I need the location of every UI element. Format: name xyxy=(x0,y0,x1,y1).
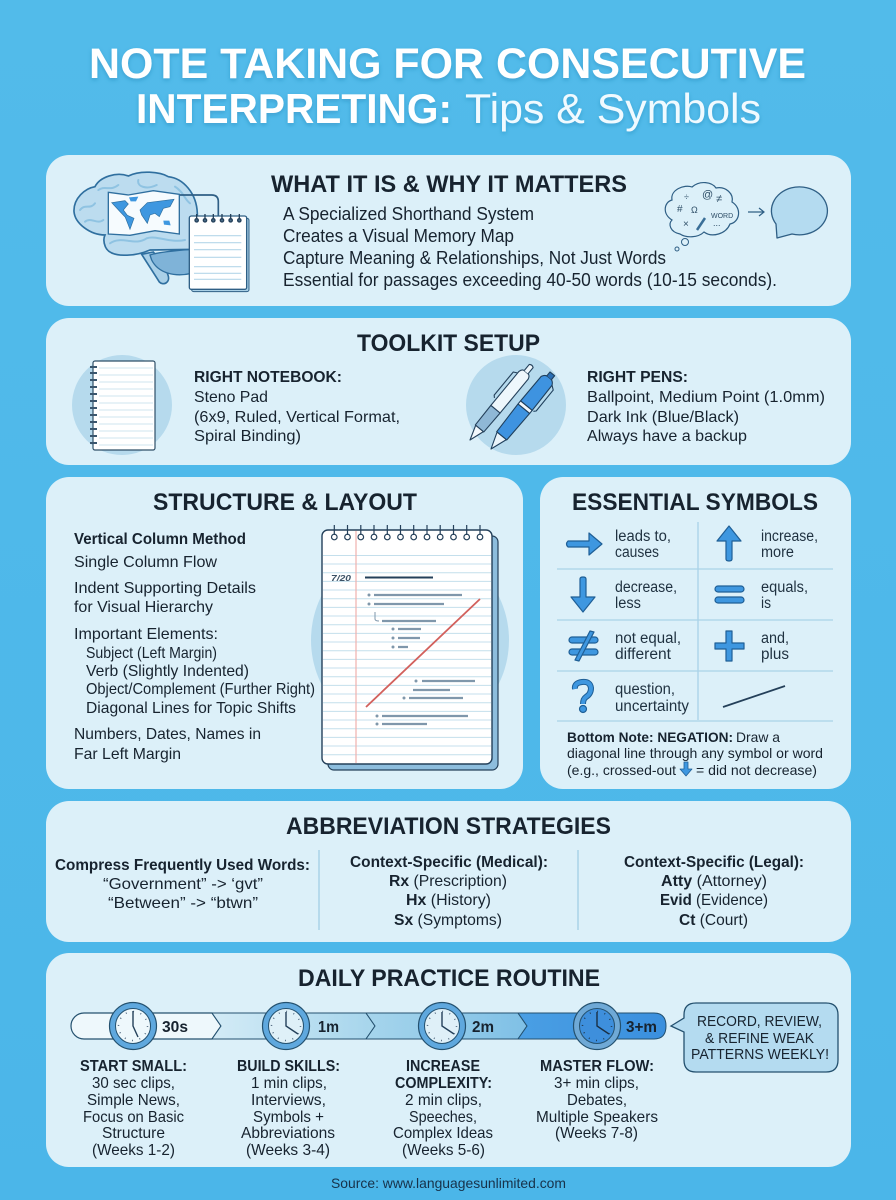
icon: clock 2 minutes xyxy=(418,1002,466,1050)
icon: thought cloud to speech bubble: WORD xyxy=(711,213,733,220)
column: legal: Ct (Court) xyxy=(679,912,748,929)
panel: essential symbols xyxy=(540,477,851,789)
step: master flow: Debates, xyxy=(567,1092,627,1109)
timeline bar: 2m xyxy=(472,1019,494,1036)
text block: right notebook xyxy=(194,369,400,445)
step: start small: Simple News, xyxy=(87,1092,180,1109)
icon: thought cloud to speech bubble: @ xyxy=(702,189,713,201)
source line: Source: www.languagesunlimited.com xyxy=(331,1175,566,1191)
icon: thought cloud to speech bubble: × xyxy=(683,219,689,230)
icon: clock 1 minute xyxy=(262,1002,310,1050)
symbol: question: question, xyxy=(615,681,675,698)
column: medical: Context-Specific (Medical): xyxy=(350,854,548,871)
icon: brain with map and notepad xyxy=(74,172,249,292)
step: start small: (Weeks 1-2) xyxy=(92,1142,175,1159)
text block: layout rules: Diagonal Lines for Topic Shifts xyxy=(86,700,296,717)
symbol: negation line xyxy=(723,686,785,707)
step: master flow xyxy=(536,1058,658,1142)
column: compress frequently used words: “Between” -> “btwn” xyxy=(108,895,258,912)
step: increase complexity: Speeches, xyxy=(409,1109,477,1126)
column: legal: Context-Specific (Legal): xyxy=(624,854,804,871)
callout: record review refine xyxy=(671,1003,838,1072)
panel: structure and layout xyxy=(46,477,523,789)
column: legal: Evid (Evidence) xyxy=(660,892,768,909)
text block: layout rules: Subject (Left Margin) xyxy=(86,645,217,662)
heading: daily practice routine: DAILY PRACTICE ROUTINE xyxy=(298,965,600,992)
symbol: leads to xyxy=(566,528,671,561)
step: master flow: Multiple Speakers xyxy=(536,1109,658,1126)
symbol: equals xyxy=(715,579,808,612)
step: master flow: (Weeks 7-8) xyxy=(555,1125,638,1142)
icon: thought cloud to speech bubble: ... xyxy=(713,218,721,228)
heading: what it is: WHAT IT IS & WHY IT MATTERS xyxy=(271,171,627,198)
text block: layout rules: Single Column Flow xyxy=(74,554,217,571)
symbol: increase: increase, xyxy=(761,528,818,545)
text block: right pens: Ballpoint, Medium Point (1.0mm) xyxy=(587,389,825,406)
text block: right pens: RIGHT PENS: xyxy=(587,369,688,386)
heading: structure and layout: STRUCTURE & LAYOUT xyxy=(153,489,417,516)
timeline bar: 1m xyxy=(318,1019,339,1036)
column: medical: Sx (Symptoms) xyxy=(394,912,502,929)
title: INTERPRETING: xyxy=(136,85,452,132)
symbol: equals: equals, xyxy=(761,579,808,596)
panel: toolkit setup xyxy=(46,318,851,465)
text block: what it is: A Specialized Shorthand System xyxy=(283,204,534,224)
symbol: equals: is xyxy=(761,595,771,612)
text block: right pens: Always have a backup xyxy=(587,428,747,445)
text block: right pens xyxy=(587,369,825,445)
step: increase complexity: 2 min clips, xyxy=(405,1092,482,1109)
callout: record review refine: & REFINE WEAK xyxy=(705,1030,814,1047)
panel: daily practice routine xyxy=(46,953,851,1167)
symbol: leads to: causes xyxy=(615,544,659,561)
step: build skills: Abbreviations xyxy=(241,1125,335,1142)
step: build skills: BUILD SKILLS: xyxy=(237,1058,340,1075)
text block: bottom note: = did not decrease) xyxy=(696,762,817,778)
symbol: increase: more xyxy=(761,544,794,561)
symbol: plus xyxy=(715,630,789,663)
symbol: plus: plus xyxy=(761,646,789,663)
text block: right notebook: (6x9, Ruled, Vertical Format, xyxy=(194,409,400,426)
icon: thought cloud to speech bubble xyxy=(665,183,827,251)
symbol: plus: and, xyxy=(761,630,789,647)
symbol: decrease xyxy=(571,577,677,612)
panel: what it is and why it matters xyxy=(46,155,851,306)
title: Tips & Symbols xyxy=(465,85,761,132)
text block: layout rules: for Visual Hierarchy xyxy=(74,599,213,616)
column: compress frequently used words xyxy=(55,857,310,912)
text block: right notebook: RIGHT NOTEBOOK: xyxy=(194,369,342,386)
step: increase complexity: (Weeks 5-6) xyxy=(402,1142,485,1159)
heading: abbreviation strategies: ABBREVIATION STRATEGIES xyxy=(286,813,611,840)
text block: what it is xyxy=(283,204,777,290)
symbol: question: uncertainty xyxy=(615,698,689,715)
icon: thought cloud to speech bubble: ≠ xyxy=(716,193,722,205)
text block: what it is: Capture Meaning & Relationships, Not Just Words xyxy=(283,248,666,268)
step: build skills xyxy=(237,1058,340,1159)
text block: bottom note xyxy=(567,729,823,778)
symbol: increase xyxy=(717,526,818,561)
icon: two pens xyxy=(462,355,566,456)
text block: layout rules: Far Left Margin xyxy=(74,746,181,763)
symbol: not equal: not equal, xyxy=(615,630,681,647)
symbol: decrease: decrease, xyxy=(615,579,677,596)
step: start small: Focus on Basic xyxy=(83,1109,184,1126)
symbol: not equal xyxy=(569,630,681,663)
icon: thought cloud to speech bubble: Ω xyxy=(691,205,698,215)
icon: clock 3 plus minutes xyxy=(574,1002,620,1050)
symbol: decrease: less xyxy=(615,595,641,612)
text block: right notebook: Steno Pad xyxy=(194,389,268,406)
step: start small: START SMALL: xyxy=(80,1058,187,1075)
step: build skills: Interviews, xyxy=(251,1092,326,1109)
step: increase complexity: Complex Ideas xyxy=(393,1125,493,1142)
text block: what it is: Creates a Visual Memory Map xyxy=(283,226,514,246)
step: increase complexity: COMPLEXITY: xyxy=(395,1075,492,1092)
step: master flow: MASTER FLOW: xyxy=(540,1058,654,1075)
heading: essential symbols: ESSENTIAL SYMBOLS xyxy=(572,489,818,516)
icon: thought cloud to speech bubble: ÷ xyxy=(684,192,689,202)
callout: record review refine: PATTERNS WEEKLY! xyxy=(691,1046,829,1063)
column: medical: Hx (History) xyxy=(406,892,491,909)
text block: right pens: Dark Ink (Blue/Black) xyxy=(587,409,739,426)
step: build skills: (Weeks 3-4) xyxy=(246,1142,330,1159)
text block: layout rules xyxy=(74,531,315,763)
text block: layout rules: Important Elements: xyxy=(74,626,218,643)
step: build skills: Symbols + xyxy=(253,1109,324,1126)
symbol: question xyxy=(575,681,689,715)
text block: layout rules: Vertical Column Method xyxy=(74,531,246,548)
column: medical xyxy=(350,854,548,929)
text block: layout rules: Verb (Slightly Indented) xyxy=(86,663,249,680)
heading: toolkit setup: TOOLKIT SETUP xyxy=(357,330,540,357)
column: medical: Rx (Prescription) xyxy=(389,873,507,890)
step: increase complexity: INCREASE xyxy=(406,1058,480,1075)
column: compress frequently used words: Compress Frequently Used Words: xyxy=(55,857,310,874)
text block: bottom note: (e.g., crossed-out xyxy=(567,762,676,778)
step: build skills: 1 min clips, xyxy=(251,1075,327,1092)
panel: abbreviation strategies xyxy=(46,801,851,942)
icon: clock 30 seconds xyxy=(110,1002,156,1050)
step: increase complexity xyxy=(393,1058,493,1159)
timeline bar: 3+m xyxy=(626,1019,657,1036)
text block: right notebook: Spiral Binding) xyxy=(194,428,301,445)
column: legal xyxy=(624,854,804,929)
step: start small: Structure xyxy=(102,1125,165,1142)
step: master flow: 3+ min clips, xyxy=(554,1075,639,1092)
callout: record review refine: RECORD, REVIEW, xyxy=(697,1013,822,1030)
symbol: leads to: leads to, xyxy=(615,528,671,545)
illustration: note page with vertical layout xyxy=(311,525,509,770)
step: start small: 30 sec clips, xyxy=(92,1075,175,1092)
timeline bar: 30s xyxy=(162,1019,188,1036)
icon: steno notebook xyxy=(72,355,172,455)
illustration: note page with vertical layout: 7/20 xyxy=(331,573,351,583)
title: NOTE TAKING FOR CONSECUTIVE xyxy=(89,40,806,88)
text block: bottom note: Bottom Note: NEGATION: xyxy=(567,729,733,745)
symbol: not equal: different xyxy=(615,646,672,663)
column: compress frequently used words: “Government” -> ‘gvt” xyxy=(103,876,263,893)
text block: layout rules: Object/Complement (Further Right) xyxy=(86,681,315,698)
text block: layout rules: Indent Supporting Details xyxy=(74,580,256,597)
text block: bottom note: diagonal line through any symbol or word xyxy=(567,745,823,761)
icon: thought cloud to speech bubble: # xyxy=(677,204,683,215)
step: start small xyxy=(80,1058,187,1159)
timeline bar xyxy=(71,1013,666,1039)
text block: what it is: Essential for passages exceeding 40-50 words (10-15 seconds). xyxy=(283,270,777,290)
column: legal: Atty (Attorney) xyxy=(661,873,767,890)
title xyxy=(89,40,806,132)
text block: layout rules: Numbers, Dates, Names in xyxy=(74,726,261,743)
text block: bottom note: Draw a xyxy=(736,729,780,745)
